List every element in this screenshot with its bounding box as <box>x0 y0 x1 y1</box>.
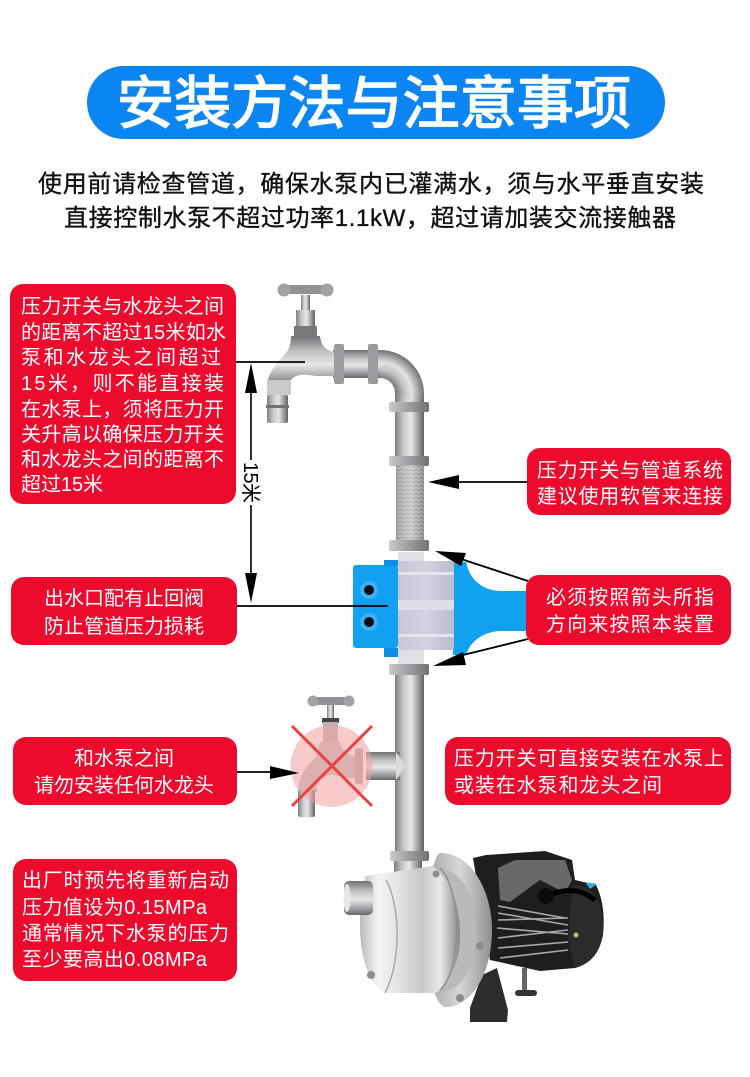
callout: arrow direction <box>526 575 731 645</box>
callout: distance limit: 压力开关与水龙头之间 <box>21 295 224 318</box>
callout: distance limit: 泵和水龙头之间超过 <box>21 346 221 369</box>
pump outlet neck <box>390 851 429 878</box>
arrow: to prohibited faucet <box>237 766 299 779</box>
callout: distance limit: 关升高以确保压力开关 <box>21 423 224 446</box>
callout: no faucet: 请勿安装任何水龙头 <box>34 774 214 797</box>
callout: distance limit: 的距离不超过15米如水 <box>21 321 226 344</box>
callout: check valve: 出水口配有止回阀 <box>44 587 204 610</box>
pump feet <box>470 968 537 1022</box>
intro text <box>38 171 704 232</box>
callout: distance limit: 超过15米 <box>21 473 103 496</box>
leader line: box to check valve <box>237 605 388 607</box>
arrow: to flexible hose <box>428 475 528 489</box>
callout: factory pressure: 出厂时预先将重新启动 <box>22 869 229 892</box>
callout: arrow direction: 必须按照箭头所指 <box>546 586 714 609</box>
callout: factory pressure: 通常情况下水泵的压力 <box>22 922 229 945</box>
callout: check valve: 防止管道压力损耗 <box>44 615 204 638</box>
intro text: 直接控制水泵不超过功率1.1kW，超过请加装交流接触器 <box>64 205 676 232</box>
callout: switch position <box>445 737 731 805</box>
callout: flexible hose <box>527 448 731 515</box>
icon: upper faucet <box>266 284 334 423</box>
callout: factory pressure <box>13 859 237 981</box>
dimension line: 15 metres: 15米 <box>239 462 262 503</box>
lower vertical pipe with tee <box>366 672 424 854</box>
arrow: to lower fitting <box>433 639 528 666</box>
callout: arrow direction: 方向来按照本装置 <box>546 613 714 636</box>
arrow: to upper fitting <box>435 551 528 581</box>
pressure switch <box>353 552 527 675</box>
icon: water pump <box>344 851 604 1022</box>
callout: distance limit: 在水泵上，须将压力开 <box>21 398 224 421</box>
callout: switch position: 或装在水泵和龙头之间 <box>454 774 662 797</box>
callout: no faucet: 和水泵之间 <box>74 747 174 770</box>
intro text: 使用前请检查管道，确保水泵内已灌满水，须与水平垂直安装 <box>38 171 704 198</box>
title banner: 安装方法与注意事项 <box>117 72 631 136</box>
callout: no faucet <box>13 737 237 805</box>
stainless housing <box>344 853 492 1007</box>
icon: prohibited faucet <box>290 696 372 817</box>
callout: check valve <box>11 577 237 645</box>
callout: factory pressure: 压力值设为0.15MPa <box>22 896 208 919</box>
prohibition circle <box>290 725 372 807</box>
callout: factory pressure: 至少要高出0.08MPa <box>22 948 208 971</box>
callout: distance limit: 15米，则不能直接装 <box>21 372 224 395</box>
dimension line: 15 metres <box>239 363 262 603</box>
callout: distance limit: 和水龙头之间的距离不 <box>21 448 224 471</box>
upper horizontal pipe and elbow <box>333 344 429 466</box>
leader line: box to upper faucet <box>226 361 305 363</box>
flexible braided hose <box>389 465 429 551</box>
pipe assembly <box>333 344 527 854</box>
callout: flexible hose: 压力开关与管道系统 <box>537 459 723 482</box>
red cross <box>292 726 372 806</box>
callout: flexible hose: 建议使用软管来连接 <box>537 485 723 508</box>
motor <box>473 851 604 971</box>
callout: distance limit <box>10 284 236 504</box>
callout: switch position: 压力开关可直接安装在水泵上 <box>454 747 724 770</box>
